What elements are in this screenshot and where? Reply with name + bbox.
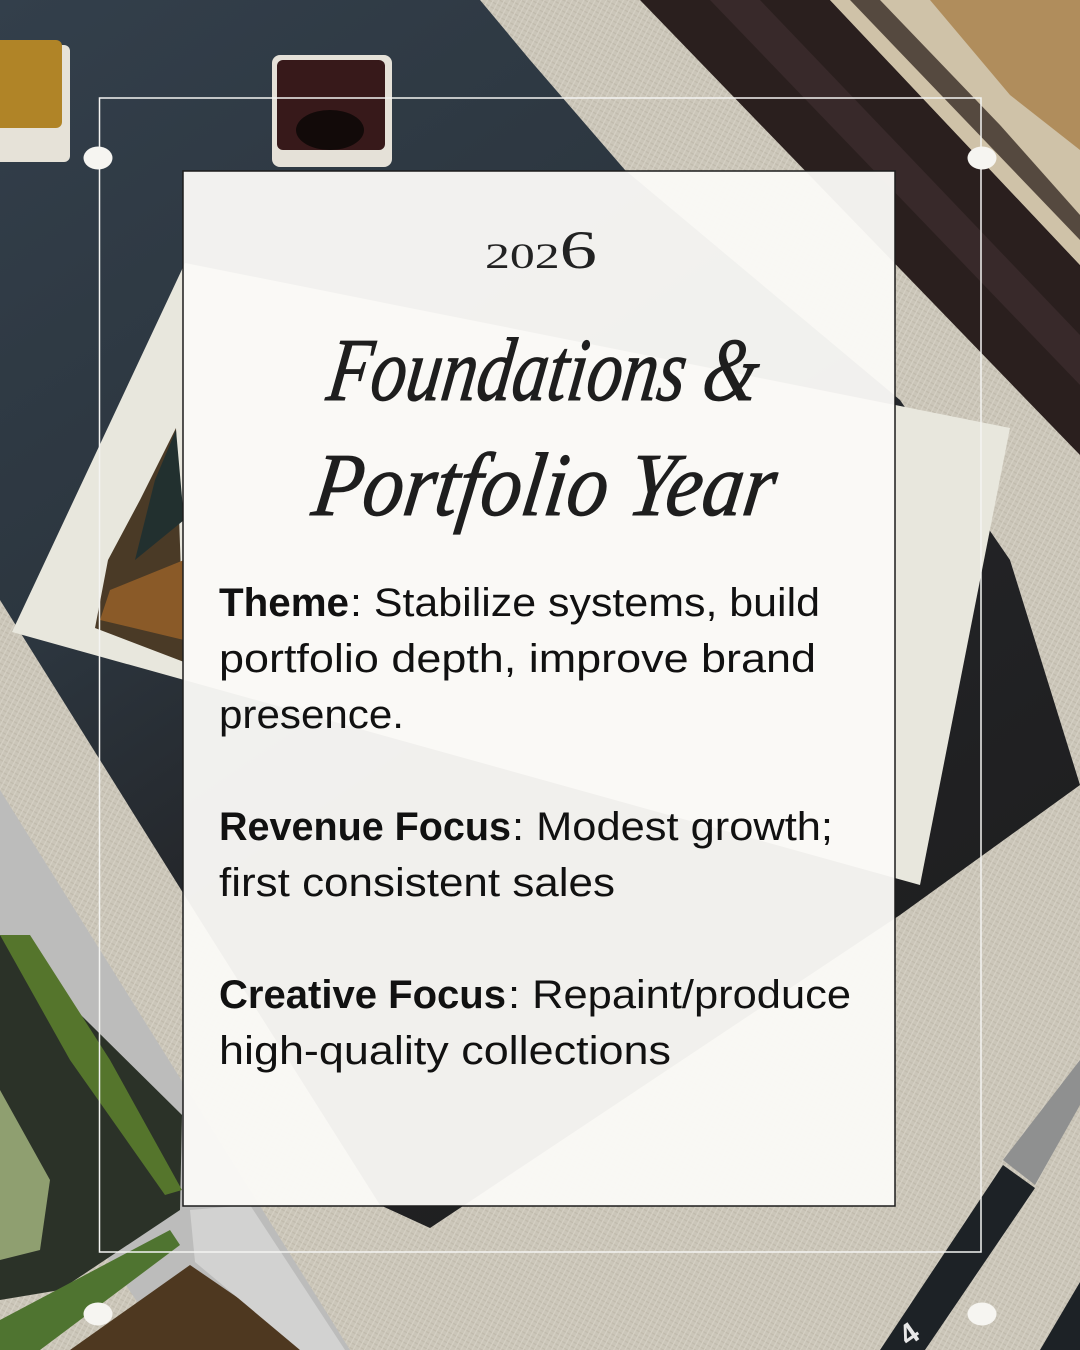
text block: creative focus: Creative Focus — [219, 973, 506, 1017]
text block: creative focus: : Repaint/produce — [508, 973, 851, 1017]
icon: paintbrush — [880, 1060, 1080, 1350]
title — [306, 319, 784, 535]
decorative frame outline — [100, 98, 981, 1252]
icon: watercolour tray — [0, 790, 350, 1350]
text block: theme: presence. — [219, 693, 404, 737]
icon: gold paint pan — [0, 40, 70, 162]
background: paper card with painted trees — [12, 263, 1010, 885]
text block: theme — [219, 581, 820, 737]
panel: translucent text card — [183, 171, 895, 1206]
year label: 202 6 — [485, 220, 597, 280]
text block: theme: : Stabilize systems, build — [350, 581, 820, 625]
text block: revenue focus — [219, 805, 833, 905]
text block: revenue focus: Revenue Focus — [219, 805, 511, 849]
text block: revenue focus: : Modest growth; — [512, 805, 833, 849]
text block: theme: portfolio depth, improve brand — [219, 637, 816, 681]
text block: revenue focus: first consistent sales — [219, 861, 615, 905]
frame ornaments — [84, 146, 996, 1326]
text block: creative focus — [219, 973, 851, 1073]
icon: brown paint pan — [272, 55, 392, 167]
background: marbled book with gold paper — [830, 0, 1080, 265]
title: Foundations & — [321, 319, 766, 420]
title: Portfolio Year — [306, 434, 784, 535]
text block: theme: Theme — [219, 581, 349, 625]
background: wooden frame — [640, 0, 1080, 455]
text block: creative focus: high-quality collections — [219, 1029, 671, 1073]
